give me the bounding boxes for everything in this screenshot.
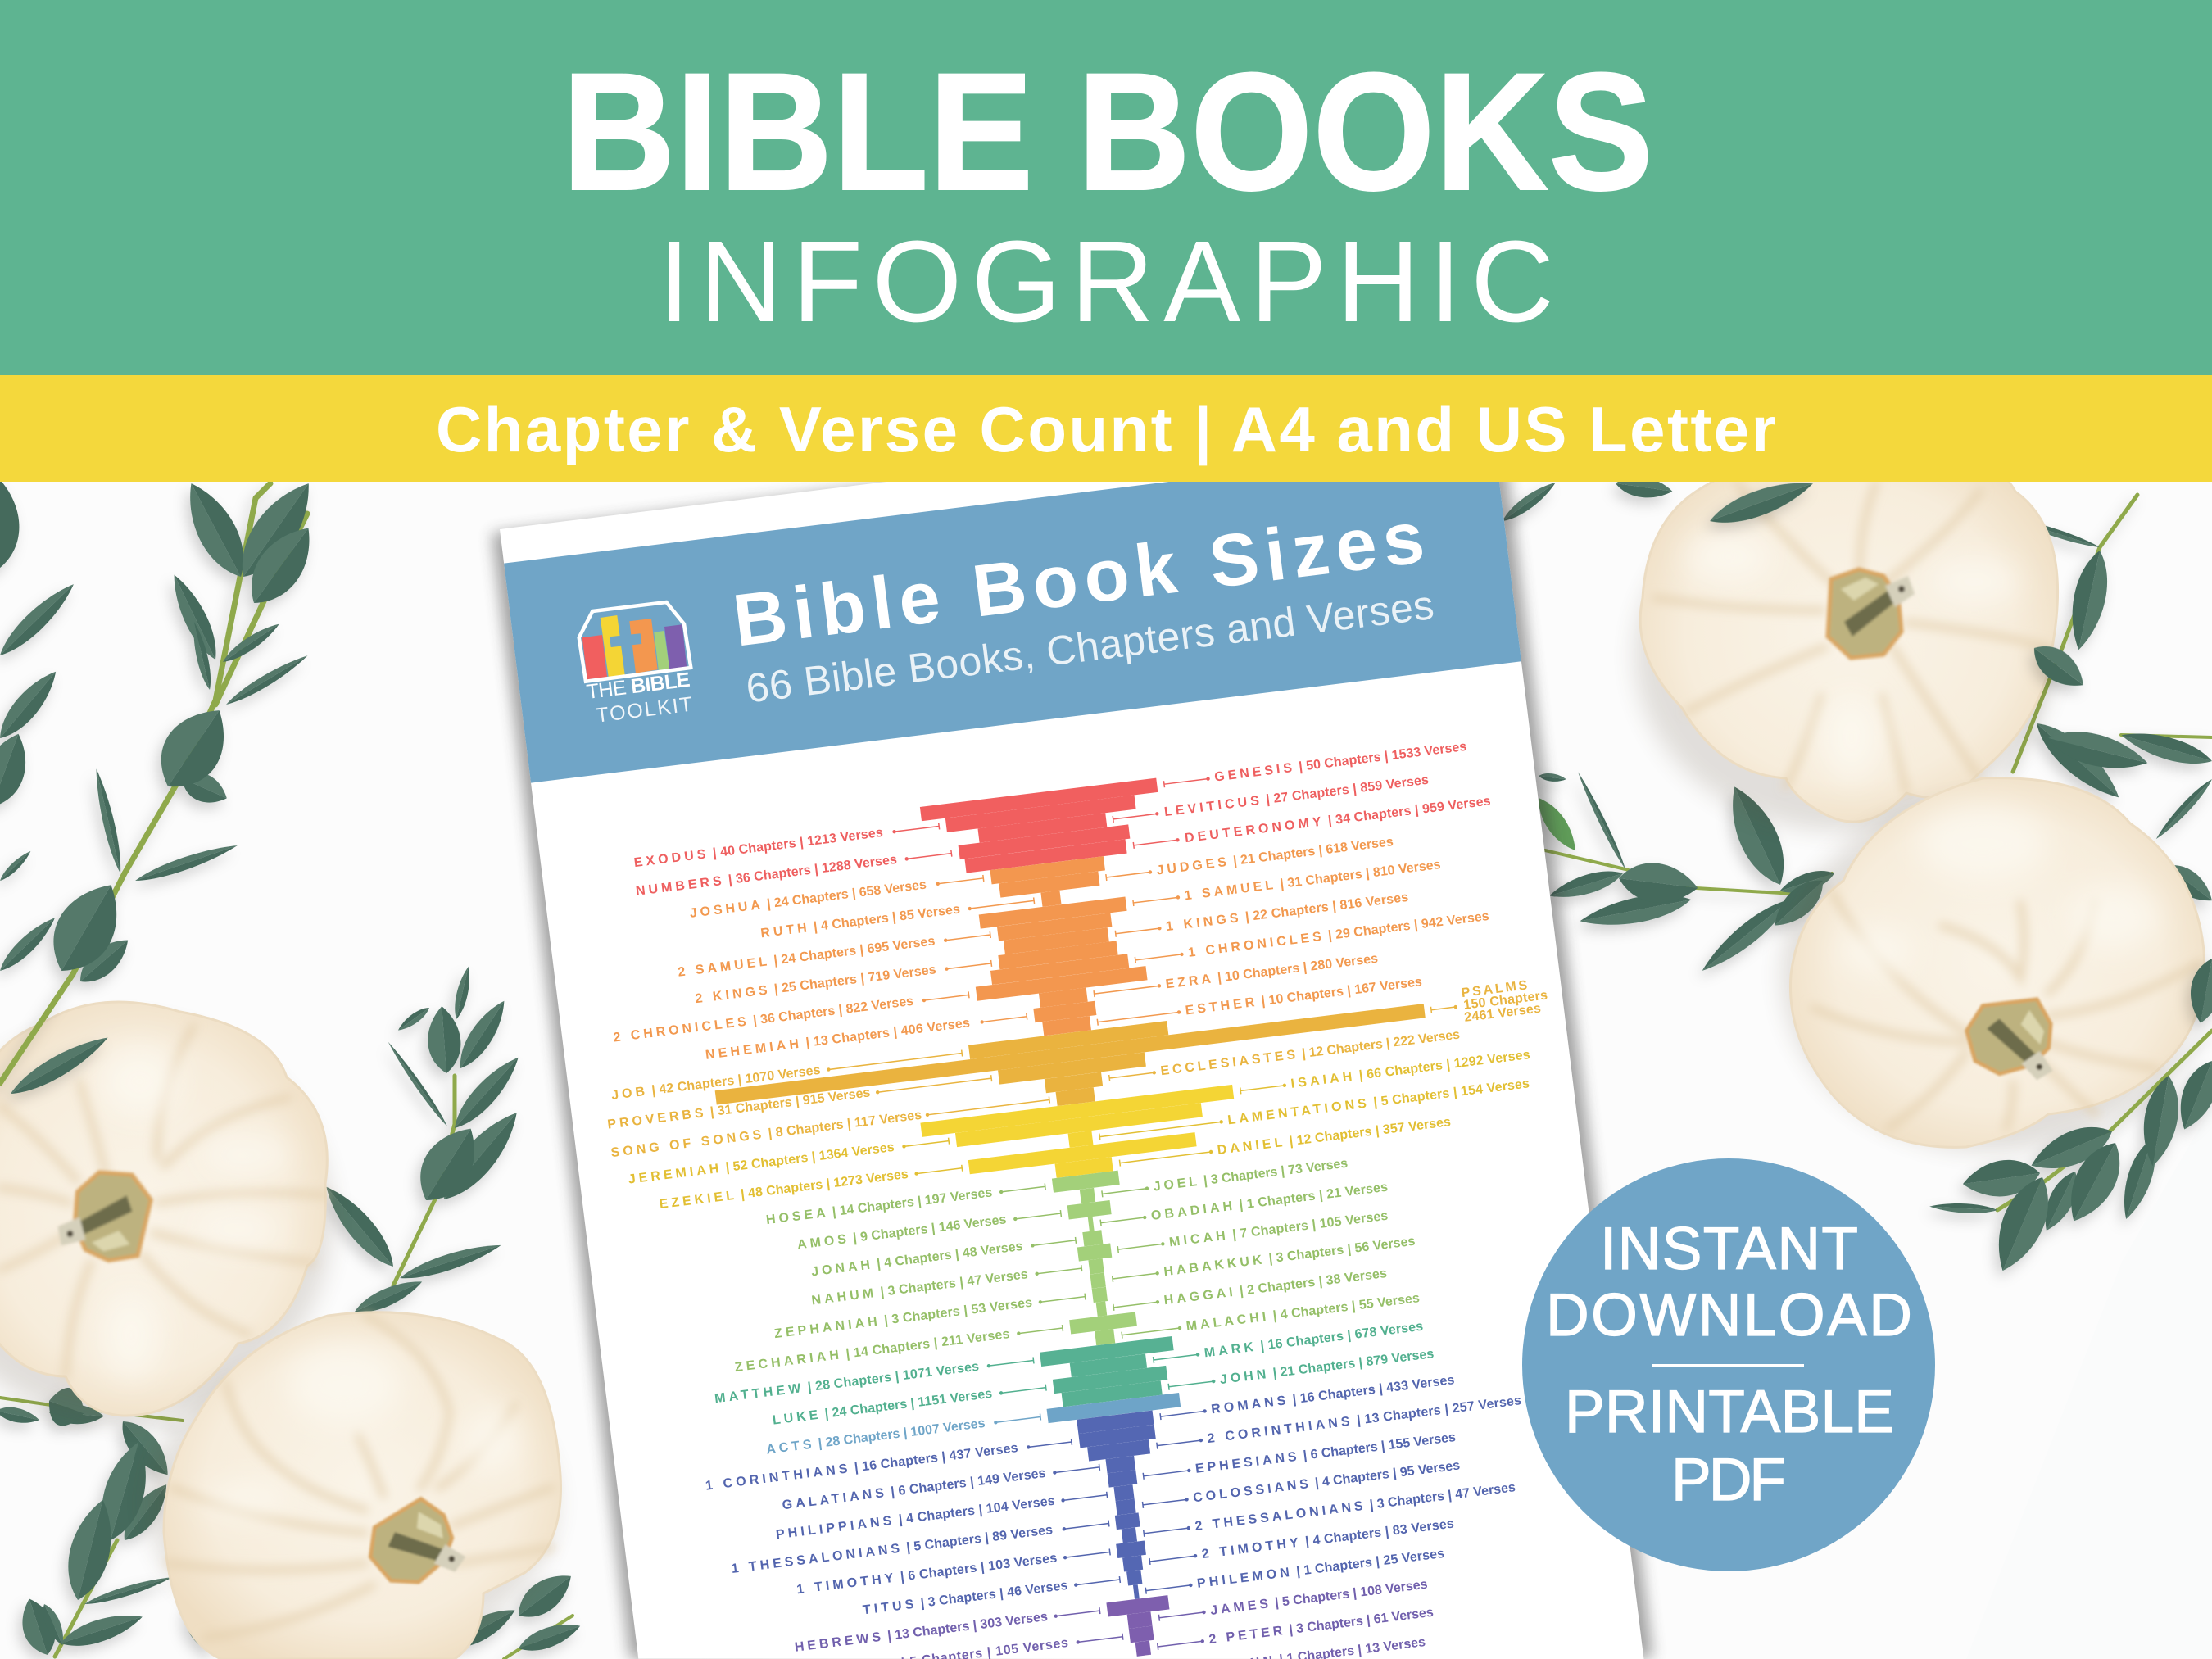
label: Job: JOB | 42 Chapters | 1070 Verses: [610, 1063, 822, 1103]
label: 2 Timothy: 2 TIMOTHY | 4 Chapters | 83 Verses: [1201, 1516, 1455, 1562]
pumpkin: top right: [1634, 442, 2058, 832]
general letter bars: [1106, 1595, 1175, 1659]
label: Malachi: MALACHI | 4 Chapters | 55 Verses: [1185, 1291, 1421, 1334]
badge text: PRINTABLE: [1565, 1379, 1894, 1445]
label: 2 Peter: 2 PETER | 3 Chapters | 61 Verses: [1208, 1606, 1435, 1647]
label: John: [1168, 1347, 1435, 1394]
label: Psalms: 2461 Verses: [1463, 1002, 1542, 1025]
label: Lamentations: LAMENTATIONS | 5 Chapters | 154 Verses: [1227, 1077, 1530, 1127]
label: Ephesians: EPHESIANS | 6 Chapters | 155 Verses: [1194, 1430, 1457, 1476]
label: Lamentations: [1099, 1077, 1530, 1144]
label: Isaiah: ISAIAH | 66 Chapters | 1292 Verses: [1290, 1048, 1531, 1091]
stacked bars: chapters per book: [684, 749, 1498, 1659]
label: Ezra: EZRA | 10 Chapters | 280 Verses: [1165, 952, 1379, 991]
label: Joshua: JOSHUA | 24 Chapters | 658 Verses: [689, 878, 927, 921]
poster subtitle: 66 Bible Books, Chapters and Verses: [744, 582, 1436, 712]
label: Jonah: JONAH | 4 Chapters | 48 Verses: [810, 1240, 1024, 1279]
label: Jeremiah: JEREMIAH | 52 Chapters | 1364 Verses: [628, 1140, 895, 1187]
label: Romans: ROMANS | 16 Chapters | 433 Verses: [1210, 1373, 1455, 1416]
label: Judges: JUDGES | 21 Chapters | 618 Verses: [1156, 835, 1394, 877]
label: Jonah: [810, 1233, 1077, 1279]
label: Song of Songs: [610, 1093, 1050, 1160]
label: Song of Songs: SONG OF SONGS | 8 Chapters | 117 Verses: [610, 1108, 922, 1160]
green title banner: [0, 0, 2212, 375]
label: Nahum: [811, 1261, 1082, 1308]
label: Zechariah: ZECHARIAH | 14 Chapters | 211 Verses: [734, 1327, 1011, 1375]
labels: history: [599, 810, 1497, 1087]
label: Acts: [765, 1410, 1041, 1457]
label: John: JOHN | 21 Chapters | 879 Verses: [1219, 1347, 1435, 1387]
label: Deuteronomy: DEUTERONOMY | 34 Chapters | 959 Verses: [1184, 794, 1492, 845]
secondary title: INFOGRAPHIC: [658, 216, 1554, 346]
badge text: [1546, 1216, 1912, 1513]
label: Hebrews: HEBREWS | 13 Chapters | 303 Verses: [794, 1610, 1049, 1655]
back foliage: eucalyptus branches: [0, 472, 2212, 1659]
label: Daniel: DANIEL | 12 Chapters | 357 Verses: [1217, 1115, 1452, 1158]
label: Nehemiah: NEHEMIAH | 13 Chapters | 406 Verses: [705, 1016, 971, 1063]
label: Amos: [796, 1206, 1062, 1252]
label: 2 Corinthians: 2 CORINTHIANS | 13 Chapters | 257 Verses: [1207, 1394, 1522, 1446]
label: Esther: ESTHER | 10 Chapters | 167 Verses: [1185, 975, 1423, 1018]
labels: major prophets: [626, 1048, 1538, 1229]
badge text: PDF: [1671, 1447, 1786, 1513]
logo wordmark: TOOLKIT: [595, 693, 693, 728]
label: 1 Kings: 1 KINGS | 22 Chapters | 816 Verses: [1165, 891, 1409, 934]
label: Proverbs: PROVERBS | 31 Chapters | 915 Verses: [607, 1086, 871, 1132]
label: Obadiah: OBADIAH | 1 Chapters | 21 Verses: [1150, 1181, 1389, 1223]
logo colored books: [582, 615, 687, 679]
label: Galatians: GALATIANS | 6 Chapters | 149 Verses: [782, 1466, 1047, 1512]
label: Matthew: MATTHEW | 28 Chapters | 1071 Verses: [714, 1360, 980, 1406]
label: 1 Corinthians: 1 CORINTHIANS | 16 Chapters | 437 Verses: [705, 1441, 1019, 1494]
label: Amos: AMOS | 9 Chapters | 146 Verses: [796, 1213, 1007, 1252]
label: Ruth: RUTH | 4 Chapters | 85 Verses: [760, 903, 961, 941]
label: Malachi: [1121, 1291, 1421, 1342]
gospel bars: [1040, 1336, 1179, 1409]
label: Habakkuk: HABAKKUK | 3 Chapters | 56 Verses: [1163, 1235, 1416, 1279]
logo wordmark: THE BIBLE: [585, 669, 691, 704]
label: Joel: JOEL | 3 Chapters | 73 Verses: [1153, 1157, 1349, 1194]
label: Ruth: [760, 893, 1035, 941]
label: Daniel: [1119, 1115, 1452, 1170]
label: Psalms: [1429, 977, 1550, 1029]
label: Colossians: COLOSSIANS | 4 Chapters | 95 Verses: [1192, 1458, 1461, 1505]
acts bar: [1047, 1393, 1181, 1423]
poster header band: [504, 442, 1521, 783]
label: Nahum: NAHUM | 3 Chapters | 47 Verses: [811, 1267, 1029, 1308]
main title: BIBLE BOOKS: [562, 39, 1653, 225]
logo wordmark: [585, 669, 694, 728]
major prophet bars: [920, 1085, 1241, 1194]
pumpkin: right: [1782, 778, 2204, 1151]
labels: minor prophets: [717, 1135, 1423, 1389]
label: 1 Thessalonians: 1 THESSALONIANS | 5 Chapters | 89 Verses: [731, 1523, 1054, 1576]
label: Hosea: HOSEA | 14 Chapters | 197 Verses: [765, 1185, 993, 1227]
label: Zephaniah: ZEPHANIAH | 3 Chapters | 53 Verses: [773, 1296, 1033, 1341]
front foliage over the pumpkins: [0, 472, 2212, 1279]
pumpkin: bottom: [147, 1312, 560, 1659]
minor prophet bars: [1052, 1171, 1139, 1349]
badge: instant download, printable PDF: [1522, 1158, 1935, 1571]
label: 2 Thessalonians: 2 THESSALONIANS | 3 Chapters | 47 Verses: [1194, 1480, 1516, 1534]
label: Proverbs: [607, 1071, 992, 1132]
logo house outline: [579, 602, 691, 682]
label: Genesis: GENESIS | 50 Chapters | 1533 Verses: [1213, 740, 1467, 785]
label: 1 Chronicles: 1 CHRONICLES | 29 Chapters | 942 Verses: [1187, 909, 1490, 960]
label: James: JAMES | 5 Chapters | 108 Verses: [1209, 1578, 1429, 1618]
pumpkin: left: [0, 1002, 332, 1421]
label: Luke: [772, 1380, 1047, 1428]
labels: poetry: [603, 974, 1553, 1160]
label: Job: [610, 1046, 963, 1103]
label: Ecclesiastes: ECCLESIASTES | 12 Chapters | 222 Verses: [1160, 1028, 1461, 1078]
label: 1 Timothy: 1 TIMOTHY | 6 Chapters | 103 Verses: [796, 1551, 1058, 1597]
poster title: Bible Book Sizes: [729, 496, 1429, 663]
yellow subtitle strip: Chapter & Verse Count | A4 and US Letter: [436, 393, 1776, 465]
label: Ezra: [1093, 952, 1379, 1000]
label: Titus: [862, 1572, 1121, 1617]
label: Ezekiel: EZEKIEL | 48 Chapters | 1273 Verses: [659, 1167, 909, 1212]
law bars: [920, 778, 1165, 877]
label: Micah: MICAH | 7 Chapters | 105 Verses: [1168, 1209, 1389, 1249]
label: 1 Peter: [815, 1630, 1123, 1659]
label: Leviticus: LEVITICUS | 27 Chapters | 859 Verses: [1163, 773, 1430, 819]
label: 2 Samuel: 2 SAMUEL | 24 Chapters | 695 Verses: [678, 934, 936, 980]
label: Haggai: HAGGAI | 2 Chapters | 38 Verses: [1163, 1267, 1388, 1308]
labels: law: [630, 737, 1492, 913]
logo: The Bible Toolkit: [579, 602, 694, 728]
paul letters bars: [1077, 1411, 1175, 1603]
label: Psalms: 150 Chapters: [1463, 988, 1548, 1013]
poster: Bible Book Sizes: [492, 406, 1652, 1659]
labels: gospels: [714, 1304, 1435, 1448]
label: Joshua: [689, 871, 984, 921]
label: 2 Kings: 2 KINGS | 25 Chapters | 719 Verses: [695, 963, 937, 1006]
labels: general letters: [794, 1563, 1438, 1659]
yellow subtitle strip: [0, 375, 2212, 482]
poetry bars: [714, 990, 1430, 1147]
labels: letters: [703, 1366, 1539, 1649]
badge text: INSTANT: [1600, 1216, 1858, 1282]
label: Exodus: EXODUS | 40 Chapters | 1213 Verses: [633, 826, 884, 870]
label: Mark: MARK | 16 Chapters | 678 Verses: [1203, 1320, 1424, 1360]
label: Philippians: PHILIPPIANS | 4 Chapters | 104 Verses: [775, 1494, 1056, 1542]
label: Esther: [1097, 975, 1423, 1029]
label: 1 Samuel: 1 SAMUEL | 31 Chapters | 810 Verses: [1184, 858, 1442, 903]
label: Philemon: PHILEMON | 1 Chapters | 25 Verses: [1196, 1547, 1445, 1591]
badge text: DOWNLOAD: [1546, 1282, 1912, 1349]
label: Acts: ACTS | 28 Chapters | 1007 Verses: [765, 1416, 986, 1457]
label: Numbers: NUMBERS | 36 Chapters | 1288 Verses: [635, 853, 898, 899]
label: Joel: [1101, 1157, 1349, 1200]
label: Psalms: PSALMS: [1461, 978, 1531, 1000]
history bars: [962, 853, 1153, 1044]
label: Luke: LUKE | 24 Chapters | 1151 Verses: [772, 1387, 993, 1428]
label: Titus: TITUS | 3 Chapters | 46 Verses: [862, 1579, 1068, 1617]
label: 2 Chronicles: 2 CHRONICLES | 36 Chapters | 822 Verses: [613, 995, 914, 1045]
